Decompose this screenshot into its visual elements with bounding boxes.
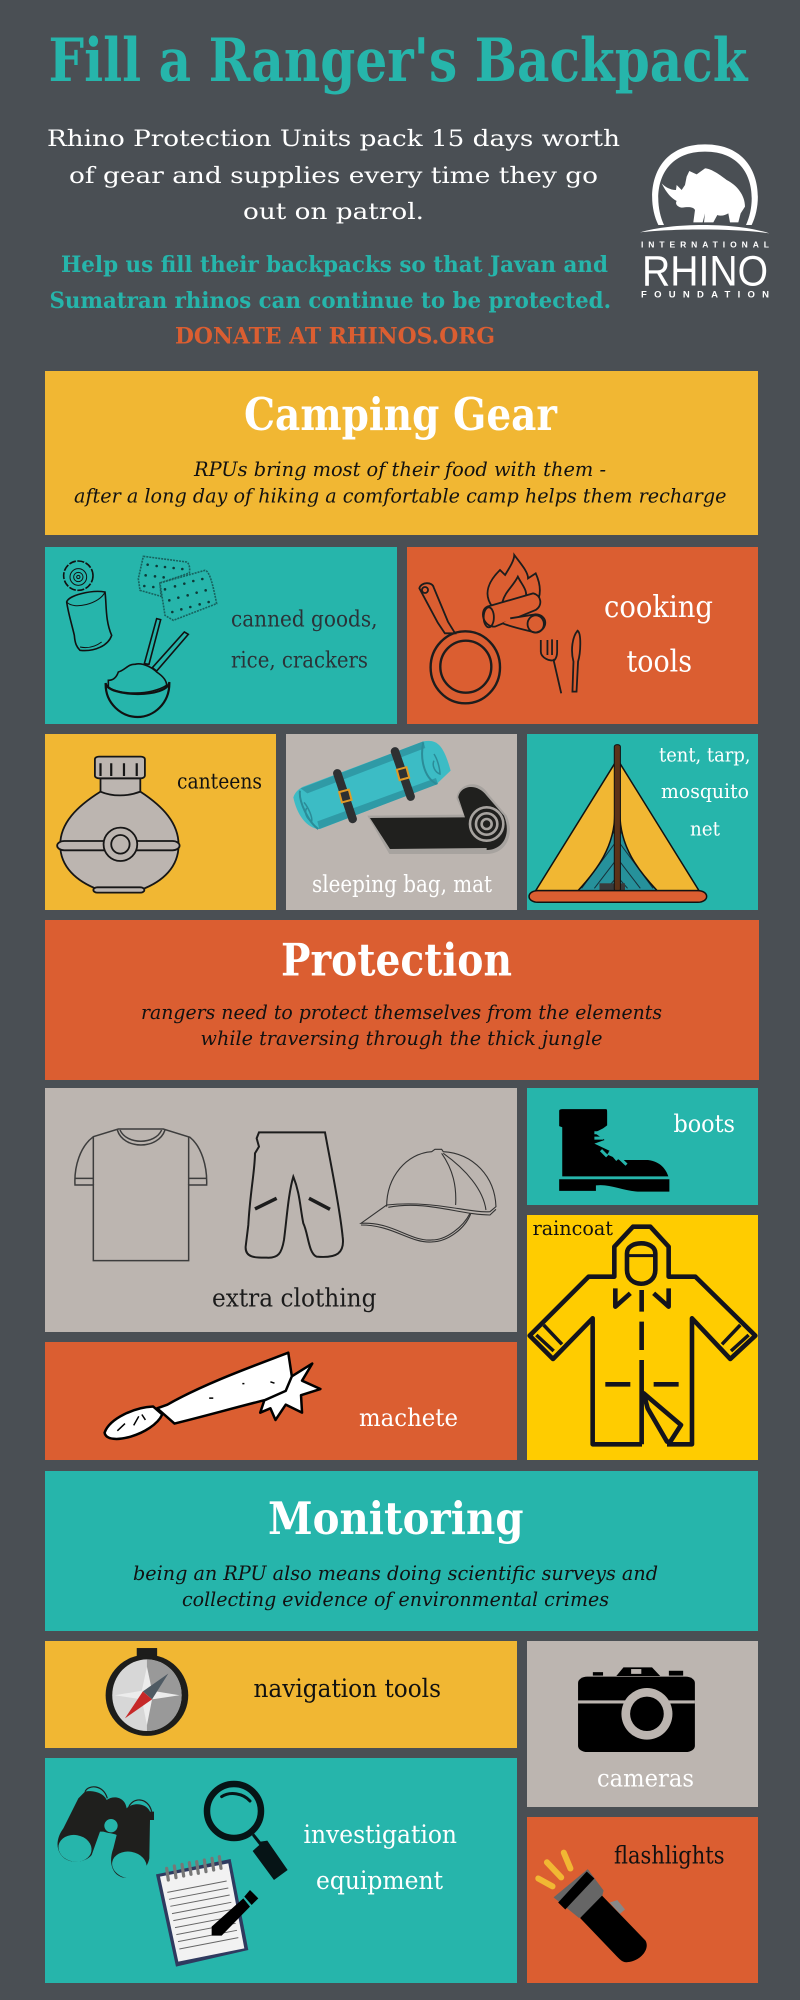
protection description: rangers need to protect themselves from the elements [141,1000,662,1024]
icon: notepad and pencil [156,1857,258,1967]
icon: compass [106,1648,188,1736]
icon: boot [559,1109,669,1192]
label: cooking tools: cooking [604,590,713,625]
panel: protection header [45,920,759,1080]
label: canteens: canteens [177,770,262,794]
label: cooking tools [604,590,713,680]
label: extra clothing: extra clothing [212,1284,376,1312]
label: tent, tarp, mosquito net [659,743,750,841]
call to action [50,252,611,314]
icon: binoculars [56,1787,154,1881]
panel: monitoring header [45,1471,758,1631]
intro text [47,127,620,225]
label: navigation tools: navigation tools [254,1674,441,1703]
camping description [74,457,726,508]
label: investigation equipment [304,1820,457,1895]
label: flashlights: flashlights [614,1842,724,1870]
label: sleeping bag, mat: sleeping bag, mat [312,872,493,898]
panel: cameras [527,1641,758,1807]
label: tent, tarp, mosquito net: tent, tarp, [659,743,750,767]
panel: canteens [45,734,276,910]
panel: investigation equipment [45,1758,517,1983]
label: canned goods: canned goods, [231,608,378,633]
monitoring description: collecting evidence of environmental crimes [182,1587,609,1611]
label: raincoat: raincoat [533,1216,613,1240]
icon: raincoat [530,1227,755,1444]
call to action: Sumatran rhinos can continue to be protected. [50,288,611,314]
label: tent, tarp, mosquito net: mosquito [661,779,749,803]
label: tent, tarp, mosquito net: net [690,817,720,841]
label: cameras: cameras [597,1764,694,1792]
panel: boots [527,1088,758,1205]
protection description: while traversing through the thick jungle [200,1026,602,1050]
panel: extra clothing [45,1088,517,1332]
icon: sleeping bag and mat [293,741,510,854]
logo: International Rhino Foundation: RHINO [642,248,768,296]
icon: camera [578,1667,695,1752]
intro text: Rhino Protection Units pack 15 days worth [47,127,620,152]
icon: magnifying glass [207,1784,288,1880]
label: canned goods: rice, crackers [231,649,368,674]
monitoring description: being an RPU also means doing scientific surveys and [133,1561,658,1585]
panel: navigation tools [45,1641,517,1748]
label: investigation equipment: investigation [304,1820,457,1849]
label: machete: machete [359,1404,458,1432]
label: cooking tools: tools [626,645,692,680]
panel: flashlights [527,1817,758,1983]
panel: camping gear header [45,371,758,535]
icon: shirt, pants and cap [75,1129,496,1261]
protection description [141,1000,662,1050]
icon: canteen [57,757,180,893]
panel: sleeping bag [286,734,517,910]
logo: International Rhino Foundation: FOUNDATION [641,290,769,300]
logo: International Rhino Foundation [640,144,769,300]
panel: cooking tools [407,547,758,724]
heading: camping gear: Camping Gear [244,388,558,441]
panel: raincoat [527,1215,758,1460]
camping description: after a long day of hiking a comfortable camp helps them recharge [74,484,726,508]
donate line: DONATE AT RHINOS.ORG [175,324,495,350]
camping description: RPUs bring most of their food with them - [193,457,606,481]
intro text: out on patrol. [243,200,424,225]
icon: tent [529,745,707,902]
panel: canned goods [45,547,397,724]
monitoring description [133,1561,658,1611]
icon: machete [105,1353,320,1439]
icon: can, crackers and rice bowl [64,556,217,717]
icon: flashlight [538,1853,647,1962]
call to action: Help us fill their backpacks so that Javan and [61,252,608,278]
logo: International Rhino Foundation: INTERNATIONAL [641,240,769,250]
label: boots: boots [674,1110,735,1138]
label: investigation equipment: equipment [316,1866,443,1895]
panel: tent [527,734,758,910]
heading: protection: Protection [281,934,512,987]
icon: pan, campfire, fork and knife [419,555,580,703]
label: canned goods [231,608,378,674]
heading: monitoring: Monitoring [268,1492,524,1545]
panel: machete [45,1342,517,1460]
intro text: of gear and supplies every time they go [69,164,598,189]
